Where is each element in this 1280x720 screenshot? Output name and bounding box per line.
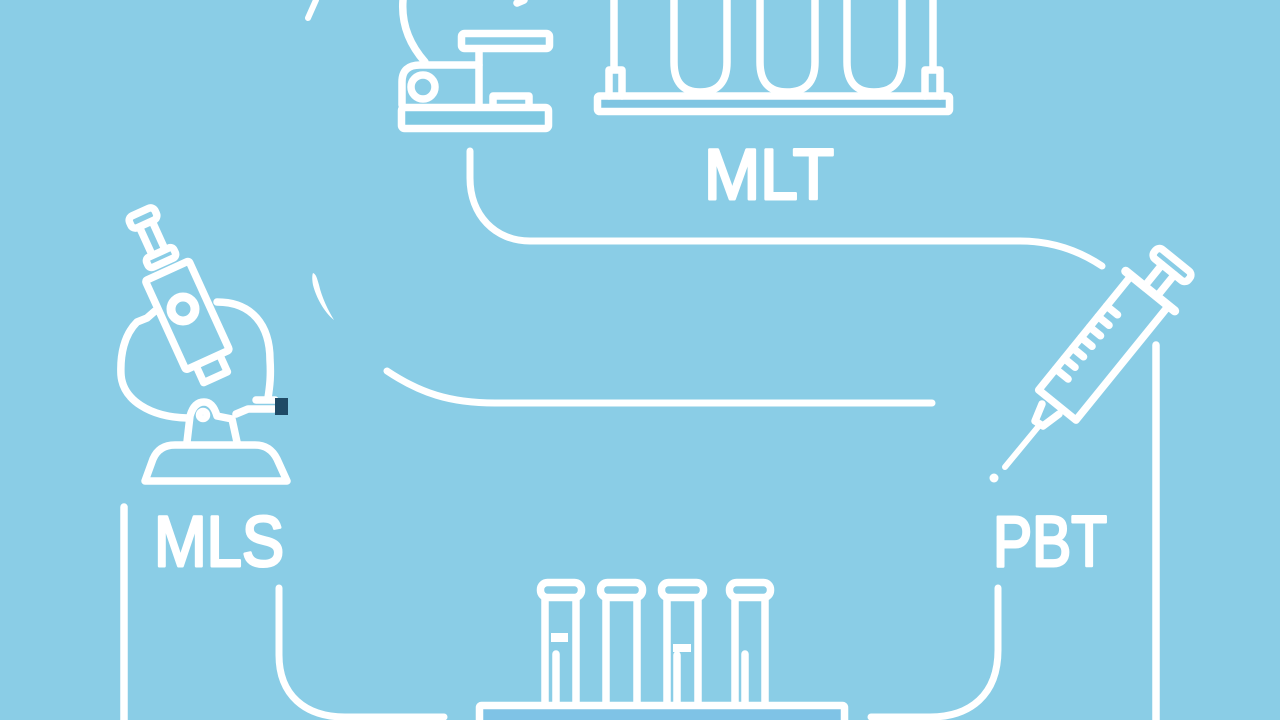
arc fragment, top centre (517, 0, 524, 3)
label: MLT: MLT (704, 136, 834, 215)
connector: centre line (387, 371, 932, 403)
icon: test tube rack, bottom (480, 582, 844, 720)
icon: tube rack, top (598, 0, 950, 112)
label: PBT: PBT (993, 503, 1107, 582)
icon: syringe (990, 240, 1200, 482)
icon: analyzer instrument, top (402, 0, 550, 128)
connector: MLS to bottom rack (279, 588, 444, 717)
dark knob (275, 398, 288, 415)
tapered arc fragment, centre left (312, 273, 334, 320)
line: left vertical (120, 507, 128, 720)
connector: PBT to bottom rack (871, 588, 998, 717)
connector: top analyzer to syringe (470, 151, 1102, 266)
arc fragment, top left (308, 0, 316, 18)
label: MLS: MLS (154, 503, 284, 582)
line: right vertical (1152, 345, 1160, 720)
icon: microscope, left (118, 202, 288, 481)
